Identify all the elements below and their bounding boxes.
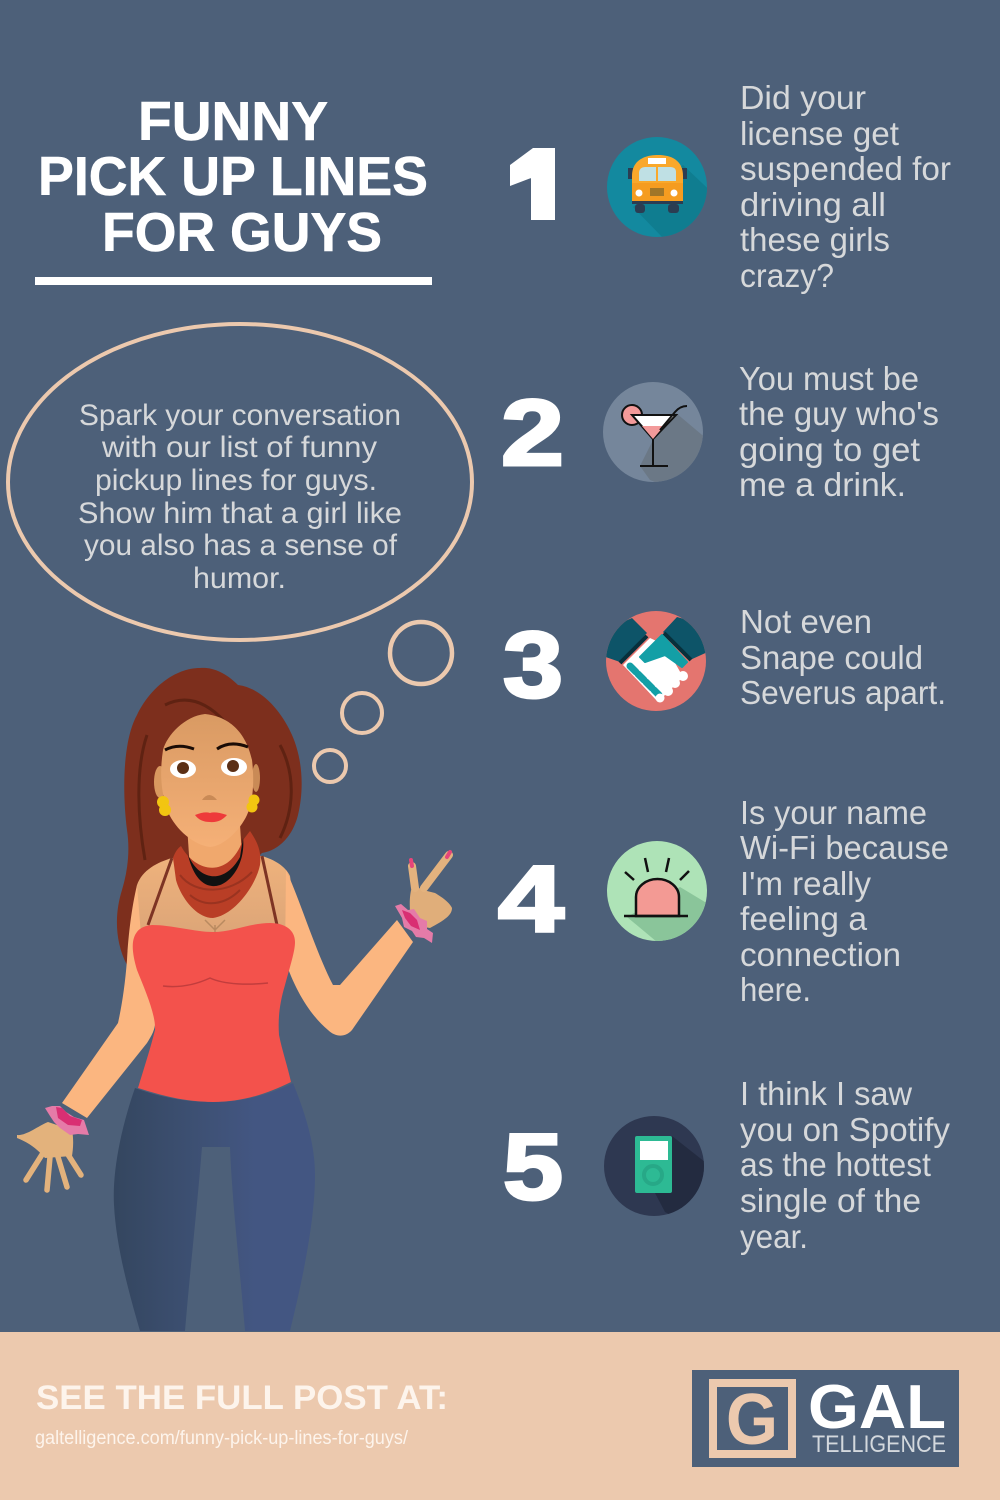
item 1 text xyxy=(740,79,951,294)
hair xyxy=(117,668,302,965)
right hand xyxy=(410,852,452,928)
left scrunchie xyxy=(45,1106,89,1135)
speech bubble: humor. xyxy=(193,562,286,595)
scarf xyxy=(173,831,260,918)
left arm xyxy=(62,885,155,1118)
earrings xyxy=(157,794,260,816)
item 2 number: 2 xyxy=(501,380,564,485)
item 3 text: Snape could xyxy=(740,639,923,676)
title: FOR GUYS xyxy=(102,201,382,263)
right scrunchie xyxy=(395,904,433,943)
item 1 text: suspended for xyxy=(740,150,951,187)
item 1 text: Did your xyxy=(740,79,866,116)
face xyxy=(161,714,253,847)
item 4 number: 4 xyxy=(498,846,564,951)
footer url: galtelligence.com/funny-pick-up-lines-for-guys/ xyxy=(35,1428,409,1449)
item 1 text: crazy? xyxy=(740,257,834,294)
icon: school bus xyxy=(607,137,707,237)
lips xyxy=(195,812,227,822)
item 2 text: me a drink. xyxy=(739,466,906,503)
speech bubble: Show him that a girl like xyxy=(78,497,402,530)
footer band xyxy=(0,1332,1000,1500)
title xyxy=(38,90,428,263)
jeans xyxy=(114,1083,315,1331)
ears xyxy=(154,766,166,798)
item 4 text: here. xyxy=(740,971,811,1008)
logo xyxy=(692,1370,959,1467)
woman character xyxy=(17,668,452,1331)
item 4 text: Is your name xyxy=(740,794,927,831)
logo: G xyxy=(726,1380,778,1460)
left hand xyxy=(17,1122,81,1190)
item 5 number: 5 xyxy=(503,1114,563,1219)
title underline xyxy=(35,277,432,285)
icon: music player xyxy=(604,1116,704,1216)
right arm xyxy=(285,870,413,1036)
item 1 number xyxy=(510,148,555,220)
item 5 text: I think I saw xyxy=(740,1075,912,1112)
speech bubble xyxy=(8,324,472,640)
item 4 text: I'm really xyxy=(740,865,871,902)
footer call to action: SEE THE FULL POST AT: xyxy=(36,1379,448,1417)
nose xyxy=(202,795,217,800)
item 5 text xyxy=(740,1075,950,1255)
logo: TELLIGENCE xyxy=(812,1431,946,1458)
icon: siren xyxy=(607,841,707,941)
item 2 text: the guy who's xyxy=(739,395,939,432)
item 5 text: as the hottest xyxy=(740,1146,931,1183)
item 3 number: 3 xyxy=(503,612,563,717)
icon: handshake xyxy=(606,611,706,711)
item 1 number: 1 xyxy=(512,135,557,240)
brows xyxy=(165,744,248,750)
speech bubble: pickup lines for guys. xyxy=(95,464,377,497)
item 3 text xyxy=(740,603,946,711)
item 4 text: connection xyxy=(740,936,901,973)
title: PICK UP LINES xyxy=(38,145,428,207)
title: FUNNY xyxy=(138,90,328,152)
item 1 text: these girls xyxy=(740,221,890,258)
top xyxy=(133,923,295,1102)
speech bubble: you also has a sense of xyxy=(84,529,398,562)
shoulders and chest xyxy=(133,856,300,950)
neck xyxy=(187,825,243,870)
item 5 text: you on Spotify xyxy=(740,1111,950,1148)
item 5 text: single of the xyxy=(740,1182,921,1219)
logo: GAL xyxy=(808,1373,946,1442)
item 1 text: license get xyxy=(740,115,899,152)
item 4 text: feeling a xyxy=(740,900,868,937)
item 4 text: Wi-Fi because xyxy=(740,829,949,866)
item 4 text xyxy=(740,794,949,1008)
straps xyxy=(148,856,277,925)
item 2 text xyxy=(739,360,939,503)
eyes xyxy=(170,760,196,778)
icon: cocktail xyxy=(603,382,703,482)
item 5 text: year. xyxy=(740,1218,808,1255)
item 3 text: Severus apart. xyxy=(740,674,946,711)
speech bubble: with our list of funny xyxy=(101,431,377,464)
thought bubbles xyxy=(314,622,452,782)
item 2 text: You must be xyxy=(739,360,919,397)
item 1 text: driving all xyxy=(740,186,886,223)
necklace xyxy=(205,920,225,945)
item 2 text: going to get xyxy=(739,431,920,468)
speech bubble: Spark your conversation xyxy=(79,399,401,432)
item 3 text: Not even xyxy=(740,603,872,640)
